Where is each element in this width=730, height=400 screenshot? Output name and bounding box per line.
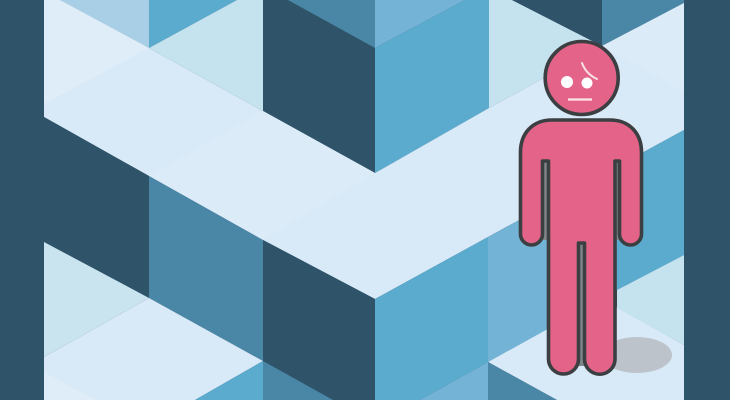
top left cube xyxy=(60,0,263,111)
left eye xyxy=(561,76,573,88)
flat mouth xyxy=(568,98,592,101)
body xyxy=(520,120,642,374)
lower left floor xyxy=(44,242,333,400)
light walkway band xyxy=(44,0,684,299)
top centre cube xyxy=(263,0,489,173)
lower right floor xyxy=(488,255,684,400)
worried pink person xyxy=(520,42,642,374)
left mid block faces xyxy=(44,117,375,400)
right eye xyxy=(582,78,592,88)
grey limb gaps xyxy=(541,160,621,366)
lower centre block xyxy=(375,130,684,400)
top right cube xyxy=(489,0,684,108)
raised eyebrow xyxy=(582,63,597,79)
figure shadow xyxy=(602,337,672,373)
head xyxy=(545,42,618,114)
